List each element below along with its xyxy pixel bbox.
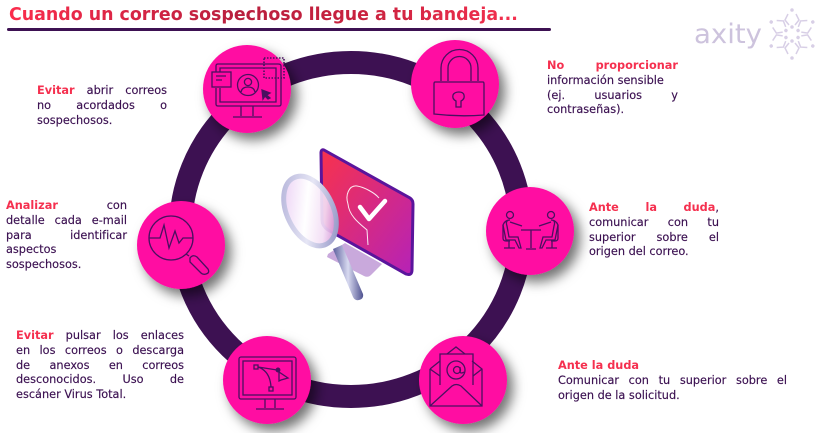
monitor stand bbox=[327, 243, 382, 277]
text: ante la duda solicitud: Ante la duda bbox=[558, 359, 639, 372]
text: analizar: para identificar bbox=[6, 229, 127, 242]
text: evitar pulsar enlaces: desconocidos. Uso de bbox=[16, 373, 184, 386]
text: evitar pulsar enlaces: Evitar pulsar los enlaces bbox=[16, 329, 184, 342]
icon circle: two people at table bbox=[486, 187, 574, 275]
text: ante la duda superior: origen del correo. bbox=[589, 245, 689, 258]
text: analizar bbox=[6, 199, 128, 271]
magnifier handle bbox=[333, 245, 363, 300]
text: ante la duda superior: superior sobre el bbox=[589, 231, 719, 244]
logo wordmark: axity bbox=[694, 19, 762, 50]
text: ante la duda solicitud bbox=[558, 359, 787, 402]
magnifier lens bbox=[273, 168, 347, 254]
text: ante la duda solicitud: origen de la solicitud. bbox=[558, 389, 680, 402]
ring bbox=[180, 62, 522, 396]
text: analizar: sospechosos. bbox=[6, 258, 81, 271]
text: evitar abrir correos: Evitar abrir correos bbox=[37, 84, 167, 97]
monitor screen bbox=[321, 150, 413, 274]
title: Cuando un correo sospechoso llegue a tu bandeja... bbox=[9, 5, 518, 25]
icon circle: magnifier with pulse bbox=[137, 201, 225, 289]
text: no proporcionar: (ej. usuarios y bbox=[547, 89, 678, 102]
icon circle: padlock bbox=[411, 40, 499, 128]
icon circle: computer profile bbox=[203, 45, 291, 133]
text: evitar pulsar enlaces: en los correos o descarga bbox=[16, 344, 184, 357]
icon circle: monitor with vector tool bbox=[223, 336, 311, 424]
text: ante la duda superior: comunicar con tu bbox=[589, 216, 719, 229]
central illustration: monitor and magnifier bbox=[273, 150, 413, 300]
text: analizar: aspectos bbox=[6, 243, 56, 256]
text: analizar: Analizar con bbox=[6, 199, 127, 212]
logo snowflake bbox=[767, 9, 817, 59]
text: evitar abrir correos bbox=[37, 84, 167, 127]
check mark bbox=[360, 201, 385, 219]
text: ante la duda superior bbox=[589, 201, 719, 258]
text: evitar abrir correos: sospechosos. bbox=[37, 114, 112, 127]
text: ante la duda solicitud: Comunicar con tu superior sobre el bbox=[558, 374, 787, 387]
icon circle: envelope with at sign bbox=[419, 336, 507, 424]
text: evitar abrir correos: no acordados o bbox=[37, 99, 167, 112]
text: evitar pulsar enlaces bbox=[16, 329, 184, 401]
title underline bbox=[7, 28, 551, 31]
text: no proporcionar bbox=[547, 59, 678, 116]
text: evitar pulsar enlaces: de anexos en correos bbox=[16, 359, 184, 372]
text: analizar: detalle cada e-mail bbox=[6, 214, 127, 227]
text: no proporcionar: contraseñas). bbox=[547, 103, 624, 116]
text: no proporcionar: No proporcionar bbox=[547, 59, 678, 72]
text: ante la duda superior: Ante la duda, bbox=[589, 201, 719, 214]
text: no proporcionar: información sensible bbox=[547, 74, 664, 87]
logo: axity bbox=[694, 8, 814, 60]
text: evitar pulsar enlaces: escáner Virus Total. bbox=[16, 388, 126, 401]
check badge bbox=[347, 186, 379, 245]
